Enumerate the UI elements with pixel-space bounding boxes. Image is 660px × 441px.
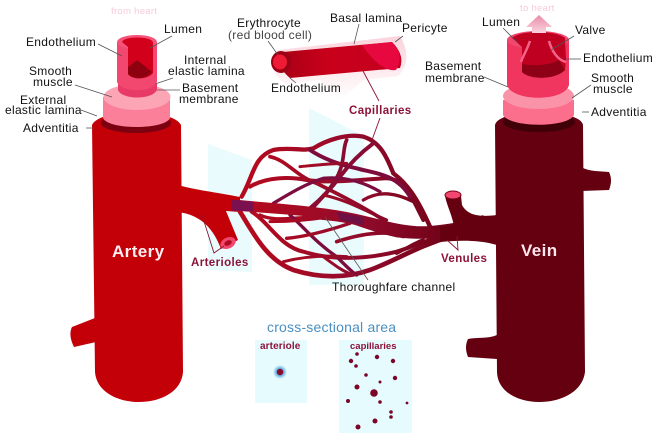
label: Adventitia (vein): Adventitia [591, 105, 647, 119]
label: Endothelium (artery): Endothelium [26, 35, 96, 49]
label: Endothelium (artery) [26, 35, 122, 56]
label: Smooth muscle (vein): Smooth [591, 71, 634, 85]
vein top shading [503, 112, 575, 132]
basal tube [280, 42, 401, 78]
label: Smooth muscle (artery): Smooth [29, 64, 72, 78]
label: Venules [441, 236, 487, 265]
label: Smooth muscle (vein) [572, 71, 634, 98]
arrow: to heart [526, 15, 552, 33]
label: External elastic lamina [5, 93, 97, 117]
artery title: Artery [112, 242, 165, 261]
label: arteriole: arteriole [260, 341, 301, 352]
label: Basement membrane (artery) [157, 81, 239, 106]
artery arteriole branch [178, 185, 240, 249]
purple nodes [232, 199, 253, 211]
label: Pericyte [395, 21, 448, 42]
panel: capillaries [339, 340, 412, 433]
label: Arterioles: Arterioles [191, 257, 249, 269]
label: Thoroughfare channel [325, 217, 455, 294]
label: Internal elastic lamina [155, 53, 245, 84]
artery top shading [101, 113, 171, 133]
label: from heart: from heart [111, 6, 157, 17]
label: Valve [551, 23, 606, 50]
label: Basement membrane (artery): membrane [179, 92, 239, 106]
vein right branch [581, 167, 611, 191]
label: Smooth muscle (vein): muscle [593, 82, 633, 96]
label: Lumen (vein): Lumen [482, 15, 520, 29]
label: Internal elastic lamina: Internal [184, 53, 226, 67]
label: Adventitia (artery): Adventitia [23, 121, 79, 135]
capillary network [232, 136, 483, 276]
vein valve [521, 41, 566, 62]
panel: arteriole [255, 340, 307, 403]
artery lower branch [70, 318, 96, 347]
label: Smooth muscle (artery) [29, 64, 112, 97]
lower vessels [240, 212, 450, 276]
label: Thoroughfare channel: Thoroughfare channel [332, 280, 455, 294]
label: Capillaries: Capillaries [349, 105, 412, 117]
vein venule branch [440, 196, 497, 245]
label: Smooth muscle (artery): muscle [33, 75, 73, 89]
label: Basement membrane (artery): Basement [182, 81, 239, 95]
vein [440, 15, 611, 402]
vein title: Vein [521, 241, 558, 260]
label: Valve: Valve [575, 23, 606, 37]
label: Endothelium (vein): Endothelium [583, 51, 653, 65]
halo [272, 36, 407, 100]
artery trunk [92, 112, 183, 402]
label: Pericyte: Pericyte [402, 21, 448, 35]
capillary detail [271, 36, 407, 100]
background panels [208, 108, 364, 285]
label: Basement membrane (vein): membrane [425, 71, 485, 85]
tube opening [271, 51, 291, 73]
artery lumen [122, 38, 153, 78]
label: Erythrocyte [228, 16, 312, 55]
label: Lumen (vein) [482, 15, 520, 43]
artery [70, 35, 240, 402]
vein lumen [512, 32, 566, 78]
label: Erythrocyte: (red blood cell) [228, 28, 312, 42]
label: Internal elastic lamina: elastic lamina [168, 64, 245, 78]
vein endothelium [507, 40, 569, 98]
label: capillaries: capillaries [350, 341, 396, 352]
label: Lumen (artery): Lumen [164, 22, 202, 36]
label: Endothelium (capillary): Endothelium [271, 81, 341, 95]
label: Lumen (artery) [150, 22, 202, 48]
cross-section panels [255, 340, 412, 433]
smooth muscle ring [103, 97, 170, 127]
vein smooth muscle [503, 100, 574, 125]
label: External elastic lamina: elastic lamina [5, 103, 82, 117]
label: Basement membrane (vein): Basement [425, 59, 482, 73]
trunk [233, 199, 483, 239]
upper vessels [242, 136, 430, 227]
vein trunk [495, 112, 585, 402]
label: Arterioles [191, 215, 249, 269]
label: Basal lamina [330, 11, 402, 44]
tunica intima tube [118, 84, 157, 98]
label: Basal lamina: Basal lamina [330, 11, 402, 25]
label: Erythrocyte: Erythrocyte [237, 16, 301, 30]
labels [5, 3, 653, 352]
label: to heart: to heart [520, 3, 555, 14]
label: cross-sectional area: cross-sectional area [267, 319, 396, 335]
label: External elastic lamina: External [20, 93, 66, 107]
vein lower branch [466, 335, 497, 359]
pericyte [362, 42, 400, 70]
label: Venules: Venules [441, 253, 487, 265]
label: Basement membrane (vein) [425, 59, 508, 87]
label: Capillaries [349, 71, 412, 140]
